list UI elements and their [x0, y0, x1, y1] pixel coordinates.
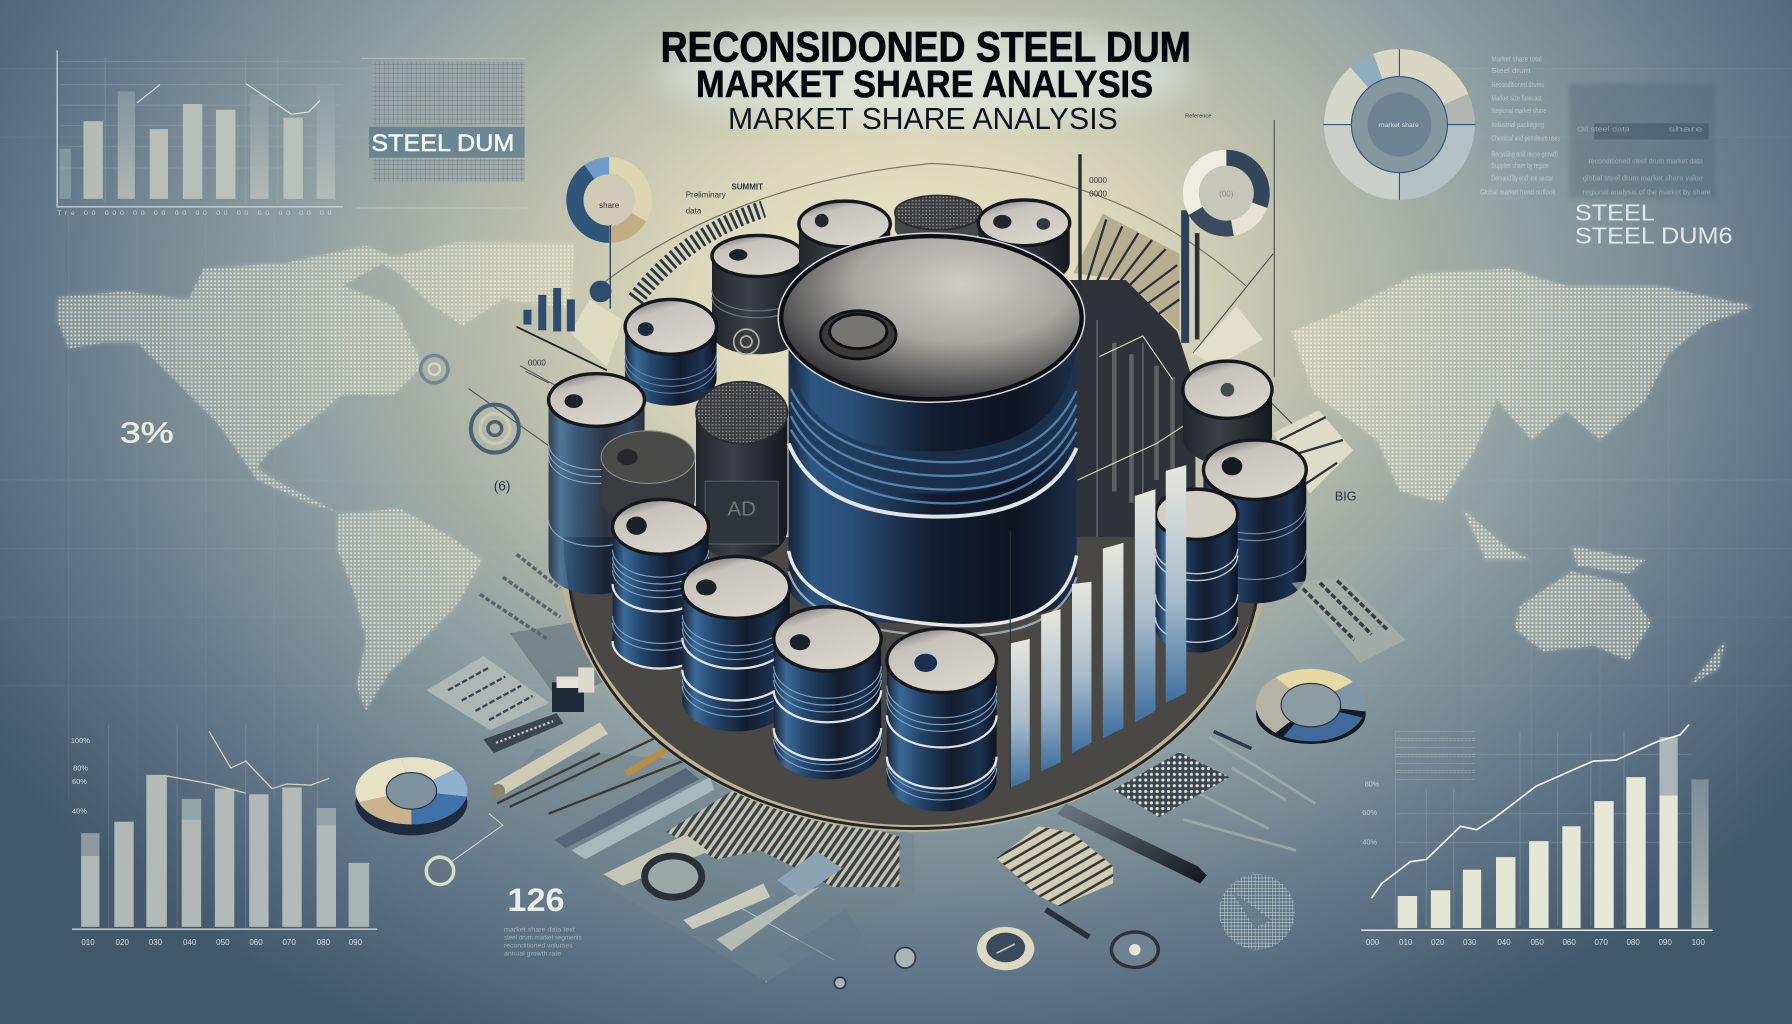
small labels around drums: BIG	[1335, 490, 1357, 504]
small labels around drums: 0000	[1089, 190, 1107, 199]
bar chart: bottom right: 40%	[1362, 838, 1378, 847]
papers and strips: lower left	[426, 554, 614, 753]
icon: dial left	[977, 927, 1034, 970]
drum: right front short	[1155, 489, 1238, 653]
small labels around drums: data	[686, 207, 702, 216]
drum: front centre	[774, 607, 881, 779]
label: steel dum6: STEEL	[1575, 200, 1655, 226]
bar chart: bottom left: 010	[81, 938, 95, 947]
halftone patch	[1113, 752, 1230, 817]
donut chart: upper left of drums: share	[599, 201, 620, 210]
data table: top right: regional analysis of the market by share	[1583, 187, 1711, 196]
text block: top right legend: Market share total	[1491, 55, 1542, 64]
title: RECONSIDONED STEEL DUM	[661, 24, 1191, 71]
title: MARKET SHARE ANALYSIS	[696, 63, 1153, 105]
text block: bottom right lines: -------------------------------------	[1395, 729, 1475, 736]
lower left panel under strips	[480, 749, 914, 982]
icon: target bottom left	[426, 814, 503, 885]
bar chart: bottom right	[1361, 725, 1713, 947]
text block: top right legend: Demand by end use sector	[1491, 174, 1554, 183]
bar chart: bottom left: 080	[317, 938, 331, 947]
small labels around drums: Reference	[1185, 114, 1211, 120]
bar chart: bottom left: 060	[249, 938, 263, 947]
bar chart: bottom left: 030	[149, 938, 163, 947]
data table with steel dum label: STEEL DUM	[371, 130, 514, 157]
label: 3 percent: 3%	[120, 417, 174, 449]
diagonal strips: lower left	[554, 768, 899, 982]
clamp block: lower left	[552, 667, 594, 712]
icon: target small	[421, 355, 448, 383]
drum: right back	[1183, 361, 1272, 465]
icon: target left	[471, 405, 519, 453]
data table with steel dum label	[357, 58, 528, 208]
text block: under 126: reconditioned volumes	[504, 942, 573, 949]
text block: top right legend: Chemical and petroleum uses	[1491, 134, 1560, 143]
pie chart: lower right	[1251, 666, 1370, 744]
drum: back centre right	[978, 200, 1070, 286]
text block: bottom right lines: -------------------------------------	[1395, 761, 1475, 768]
drum tray	[560, 537, 1269, 829]
donut chart: upper right of drums	[1191, 158, 1262, 229]
title: MARKET SHARE ANALYSIS	[728, 101, 1118, 136]
donut chart: top right	[1323, 49, 1475, 200]
bar chart: bottom right: 060	[1562, 938, 1576, 947]
dark pen	[1057, 803, 1207, 883]
drum: back centre left	[799, 201, 890, 286]
drum: left tall	[549, 374, 645, 594]
pie chart: bottom left	[355, 757, 468, 835]
bar chart: bottom left: 100%	[71, 736, 90, 745]
bar chart: bottom left: 040	[183, 938, 197, 947]
bar chart: bottom right: 010	[1399, 938, 1413, 947]
dark stick	[1046, 910, 1089, 937]
text block: bottom right lines: -------------------------------------	[1395, 745, 1475, 752]
tools: lower left	[491, 722, 686, 814]
text block: bottom right lines: =====================	[1395, 737, 1476, 744]
bar chart: bottom right: 050	[1530, 938, 1544, 947]
drum: left upper	[625, 299, 717, 406]
label: steel dum6	[1575, 200, 1733, 248]
small labels around drums: SUMMIT	[731, 183, 763, 192]
text block: top right legend: Regional market share	[1491, 106, 1546, 115]
donut chart: upper right of drums: (00)	[1219, 190, 1234, 199]
data table: top right: reconditioned steel drum market data	[1589, 156, 1704, 165]
world map: left	[57, 242, 574, 711]
small labels around drums	[494, 114, 1357, 504]
drum: front left 2	[682, 557, 790, 731]
bar chart: bottom left: 60%	[72, 777, 87, 786]
donut chart: top right: market share	[1379, 122, 1419, 129]
drum: right front tall	[1203, 440, 1306, 603]
drum: front right	[887, 629, 997, 811]
bar chart: bottom left: 80%	[73, 763, 88, 772]
drum: main large	[778, 233, 1085, 636]
text block: top right legend: Steel drum	[1491, 66, 1530, 75]
bar chart: bottom left: 070	[282, 938, 296, 947]
text block: bottom right lines: =====================	[1395, 769, 1476, 776]
bar chart: bottom right: 80%	[1365, 779, 1380, 788]
label: steel dum6: STEEL DUM6	[1575, 222, 1733, 248]
drum: mesh left	[601, 431, 695, 526]
icon: dial right	[1110, 930, 1160, 969]
bar chart: bottom right: 090	[1658, 938, 1672, 947]
data table: top right: Oil steel data	[1577, 124, 1631, 133]
text block: top right legend: Reconditioned drums	[1491, 80, 1544, 89]
drum: mesh centre: AD	[727, 497, 756, 520]
hatched plate	[997, 826, 1113, 906]
text block: top right legend: Global market trend outlook	[1480, 187, 1556, 196]
bar chart: bottom right: 070	[1594, 938, 1608, 947]
data table: top right	[1569, 83, 1715, 198]
bar chart: bottom right: 080	[1626, 938, 1640, 947]
small labels around drums: Preliminary	[686, 191, 726, 200]
title	[657, 24, 1194, 136]
text block: under 126: market share data text	[504, 926, 575, 933]
hoop ring: lower left	[642, 854, 704, 899]
label: 126: 126	[507, 882, 565, 918]
donut chart: upper left of drums	[575, 166, 643, 309]
text block: top right legend	[1480, 55, 1560, 196]
icon: spiral on dark	[734, 329, 759, 354]
drum: mesh centre	[696, 382, 787, 560]
pointer line on bar chart	[1009, 531, 1011, 789]
striped arc fan: upper left	[635, 209, 763, 299]
bar chart: bottom right: 040	[1497, 938, 1511, 947]
drum: back left	[712, 235, 803, 354]
text block: top right legend: Supplier share by region	[1491, 161, 1549, 170]
drum: back mesh	[895, 195, 982, 246]
mini bars and circle upper left	[523, 281, 611, 331]
bar chart: bottom right: 000	[1366, 938, 1380, 947]
radial fan: upper right	[1073, 214, 1179, 331]
bar chart: bottom right: 100	[1692, 938, 1706, 947]
data table: top right: share	[1669, 124, 1703, 133]
bar chart: bottom left	[71, 725, 377, 947]
drum bung	[821, 311, 896, 359]
bar chart: bottom left: 40%	[72, 807, 87, 816]
text block: under 126	[504, 926, 582, 957]
bar chart: bottom left: 090	[349, 938, 363, 947]
small labels around drums: 0000	[528, 359, 546, 368]
bar chart: bottom right: 030	[1463, 938, 1477, 947]
text block: under 126: steel drum market segments	[504, 934, 582, 941]
text block: top right legend: Recycling and reuse growth	[1491, 150, 1558, 159]
text block: under 126: annual growth rate	[504, 950, 561, 957]
bar chart: bottom right: 020	[1431, 938, 1445, 947]
bar chart: bottom right: 60%	[1362, 808, 1378, 817]
mesh globe	[1219, 874, 1295, 950]
text block: top right legend: Market size forecast	[1491, 94, 1542, 103]
small labels around drums: (6)	[494, 478, 510, 493]
world map: right	[1291, 269, 1754, 686]
bar chart: top left	[57, 50, 343, 217]
dark steel panel behind drums	[1063, 154, 1273, 594]
strips and papers: lower right	[1183, 577, 1406, 850]
bar chart: top left: Tre 00 000 00 00 00 00 00 00 00 00 00 00	[57, 210, 332, 217]
bar chart: bottom left: 050	[216, 938, 230, 947]
papers and lines around upper drums	[469, 120, 1353, 494]
icon: small dials	[834, 947, 915, 989]
text block: bottom right lines	[1395, 729, 1476, 784]
text block: top right legend: Industrial packaging	[1491, 120, 1544, 129]
rising bar chart on tray	[1010, 465, 1186, 787]
drum: front left 1	[613, 499, 709, 670]
small labels around drums: 0000	[1089, 176, 1107, 185]
bar chart: bottom left: 020	[116, 938, 130, 947]
data table: top right: global steel drum market share value	[1583, 174, 1703, 183]
text block: bottom right lines: -------------------------------------	[1395, 777, 1475, 784]
text block: bottom right lines: =====================	[1395, 753, 1476, 760]
